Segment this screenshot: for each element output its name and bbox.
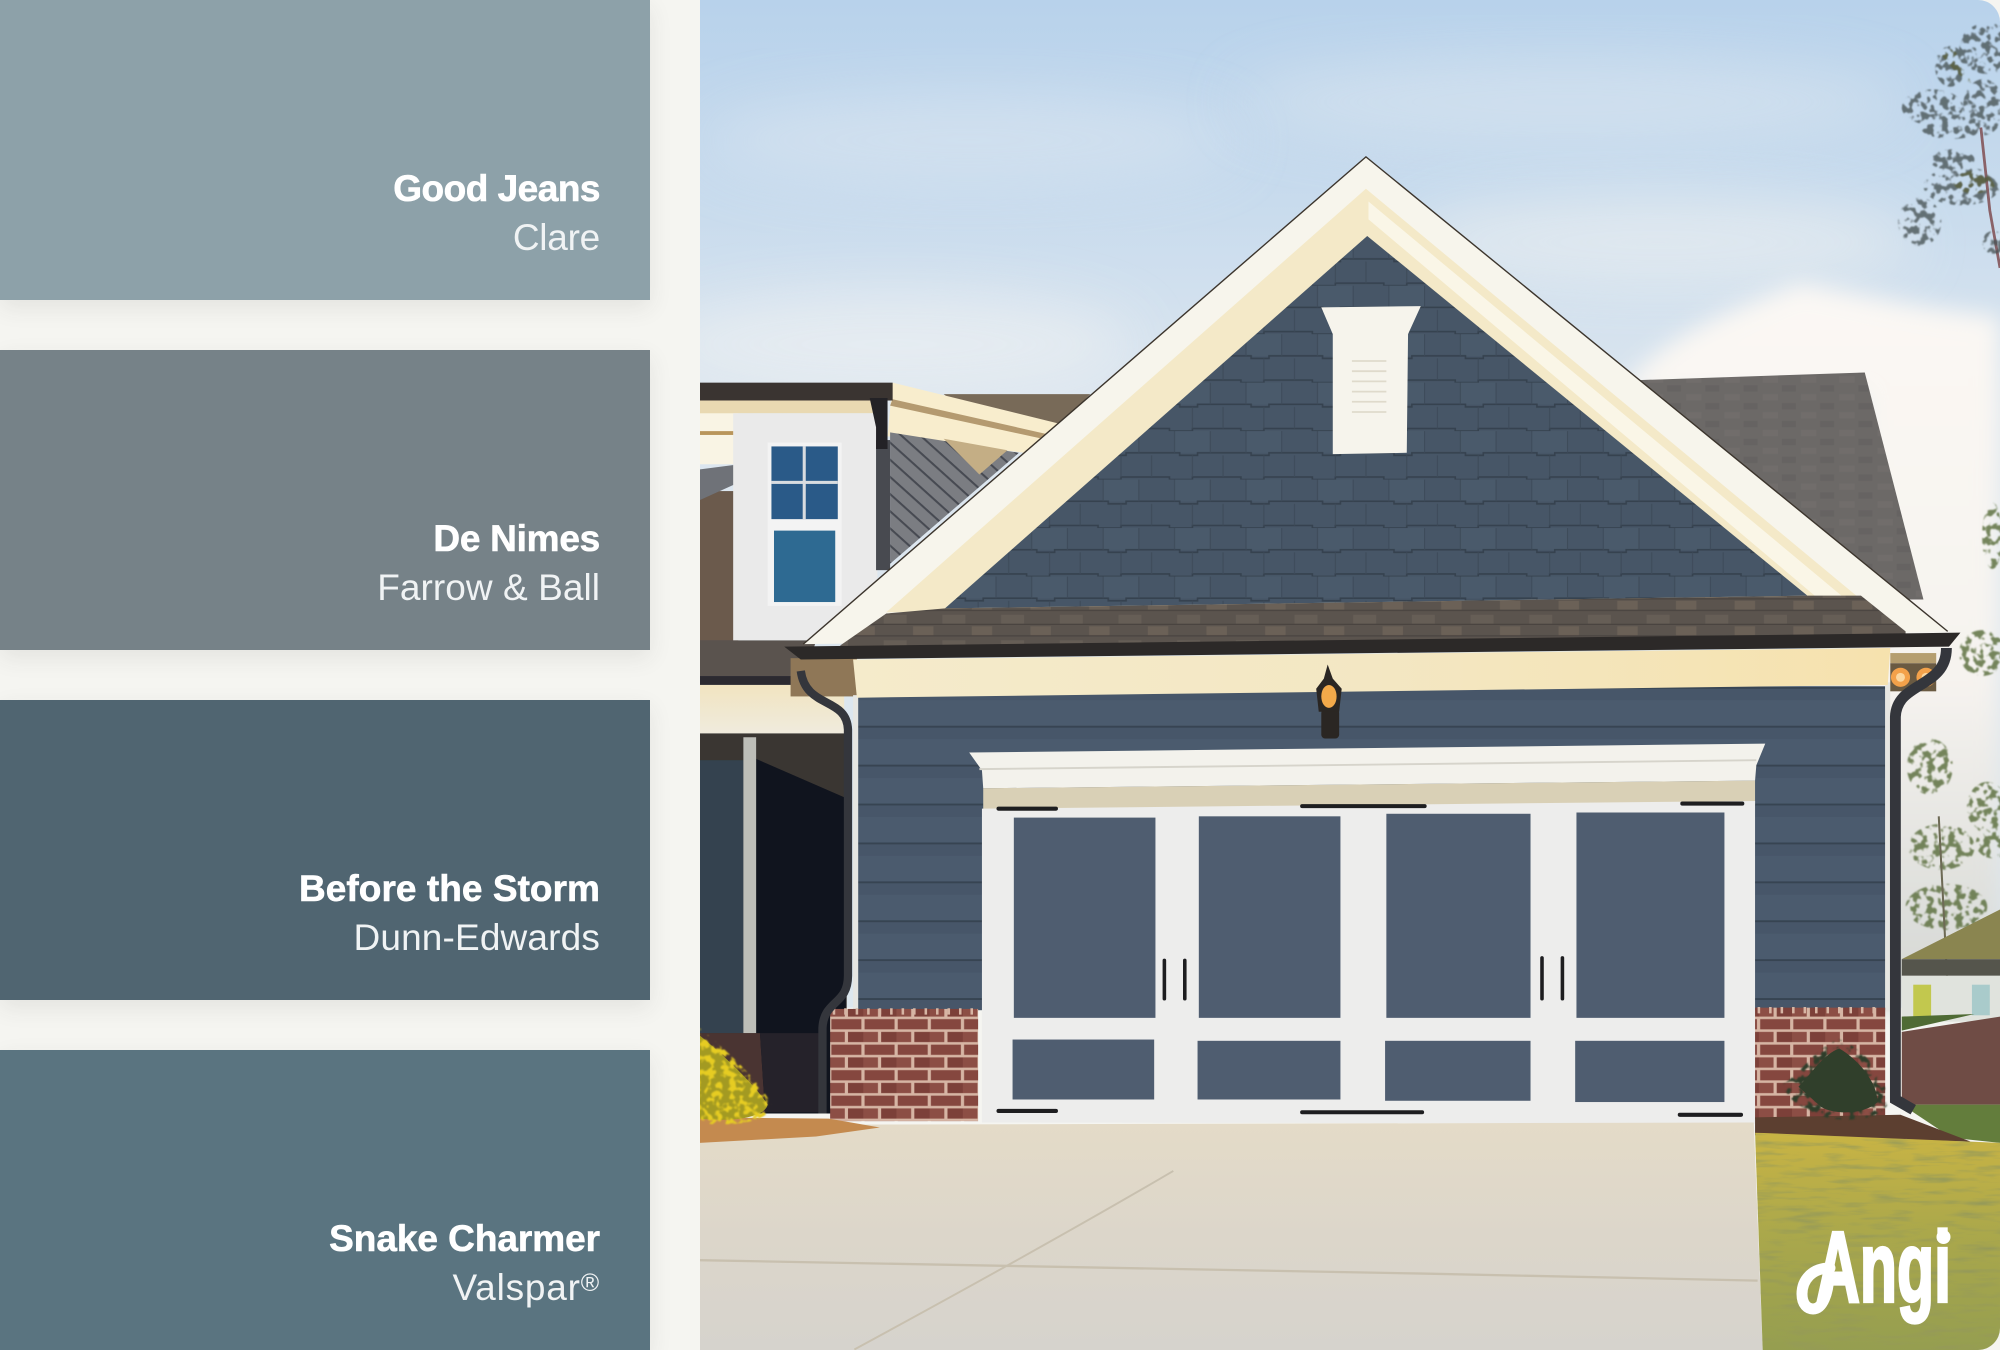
yellow shrub	[695, 1028, 773, 1124]
gable: pale inner highlight right	[1368, 202, 1843, 597]
sky with clouds	[650, 0, 2000, 1008]
main gutter	[784, 633, 1960, 659]
gable: slate shingle triangle	[945, 236, 1807, 608]
hip roof at right	[1639, 372, 1923, 599]
white door frame	[982, 801, 1755, 1124]
left roof sections	[700, 411, 816, 685]
swatch label: Snake Charmer by Valspar	[329, 1218, 600, 1308]
crown moulding	[969, 744, 1765, 788]
bottom door panels	[1013, 1040, 1724, 1102]
swatch label: De Nimes by Farrow & Ball: Farrow & Ball	[377, 567, 600, 608]
wall corner trim	[853, 682, 1890, 1011]
gable vent	[1321, 306, 1421, 454]
white cloud bank on the right	[1620, 283, 2000, 1008]
swatch label: De Nimes by Farrow & Ball: De Nimes	[433, 518, 600, 559]
swatch label: Good Jeans by Clare	[393, 168, 600, 258]
dormer with window	[700, 383, 1090, 640]
neighbouring house	[1902, 909, 2000, 1031]
swatch label: Before the Storm by Dunn-Edwards	[299, 868, 600, 958]
swatch label: Good Jeans by Clare: Clare	[513, 217, 600, 258]
driveway	[700, 1122, 1763, 1350]
panel: Good Jeans swatch	[0, 0, 650, 300]
panel: De Nimes swatch	[0, 350, 650, 650]
swatch label: De Nimes by Farrow & Ball	[377, 518, 600, 608]
mulch beds	[700, 1115, 1971, 1143]
door handles	[1164, 958, 1562, 999]
gable: white trim	[803, 157, 1948, 644]
panel: Before the Storm swatch	[0, 700, 650, 1000]
swatch label: Before the Storm by Dunn-Edwards: Dunn-Edwards	[353, 917, 600, 958]
hinges	[999, 804, 1742, 1115]
gable: cream soffit	[886, 189, 1861, 612]
upper right tree	[1898, 23, 2000, 268]
green shrub	[1783, 1040, 1888, 1120]
gable: roof edge	[803, 157, 1948, 644]
corner lights at right	[1890, 653, 1936, 691]
wall lantern	[1316, 665, 1342, 739]
main wall with lap siding	[857, 686, 1885, 1010]
swatch label: Snake Charmer by Valspar: Valspar®	[452, 1267, 600, 1308]
top door panels	[1014, 812, 1724, 1018]
dormer window	[768, 443, 842, 606]
swatch label: Snake Charmer by Valspar: Snake Charmer	[329, 1218, 600, 1259]
brick bases	[830, 1008, 1885, 1121]
cream fascia under eave	[853, 648, 1890, 698]
photo: house with blue-gray siding and garage	[700, 0, 2000, 1350]
downspouts	[801, 648, 1946, 1114]
swatch label: Good Jeans by Clare: Good Jeans	[393, 168, 600, 209]
lower right tree	[1906, 503, 2000, 1014]
porch at left	[700, 658, 857, 1114]
lower shingle roof	[840, 596, 1906, 653]
swatch label: Before the Storm by Dunn-Edwards: Before the Storm	[299, 868, 600, 909]
panel: Snake Charmer swatch	[0, 1050, 650, 1350]
background mound and lawn	[1902, 1017, 2000, 1143]
lawn	[1755, 1133, 2000, 1350]
garage door surround	[969, 744, 1765, 1124]
